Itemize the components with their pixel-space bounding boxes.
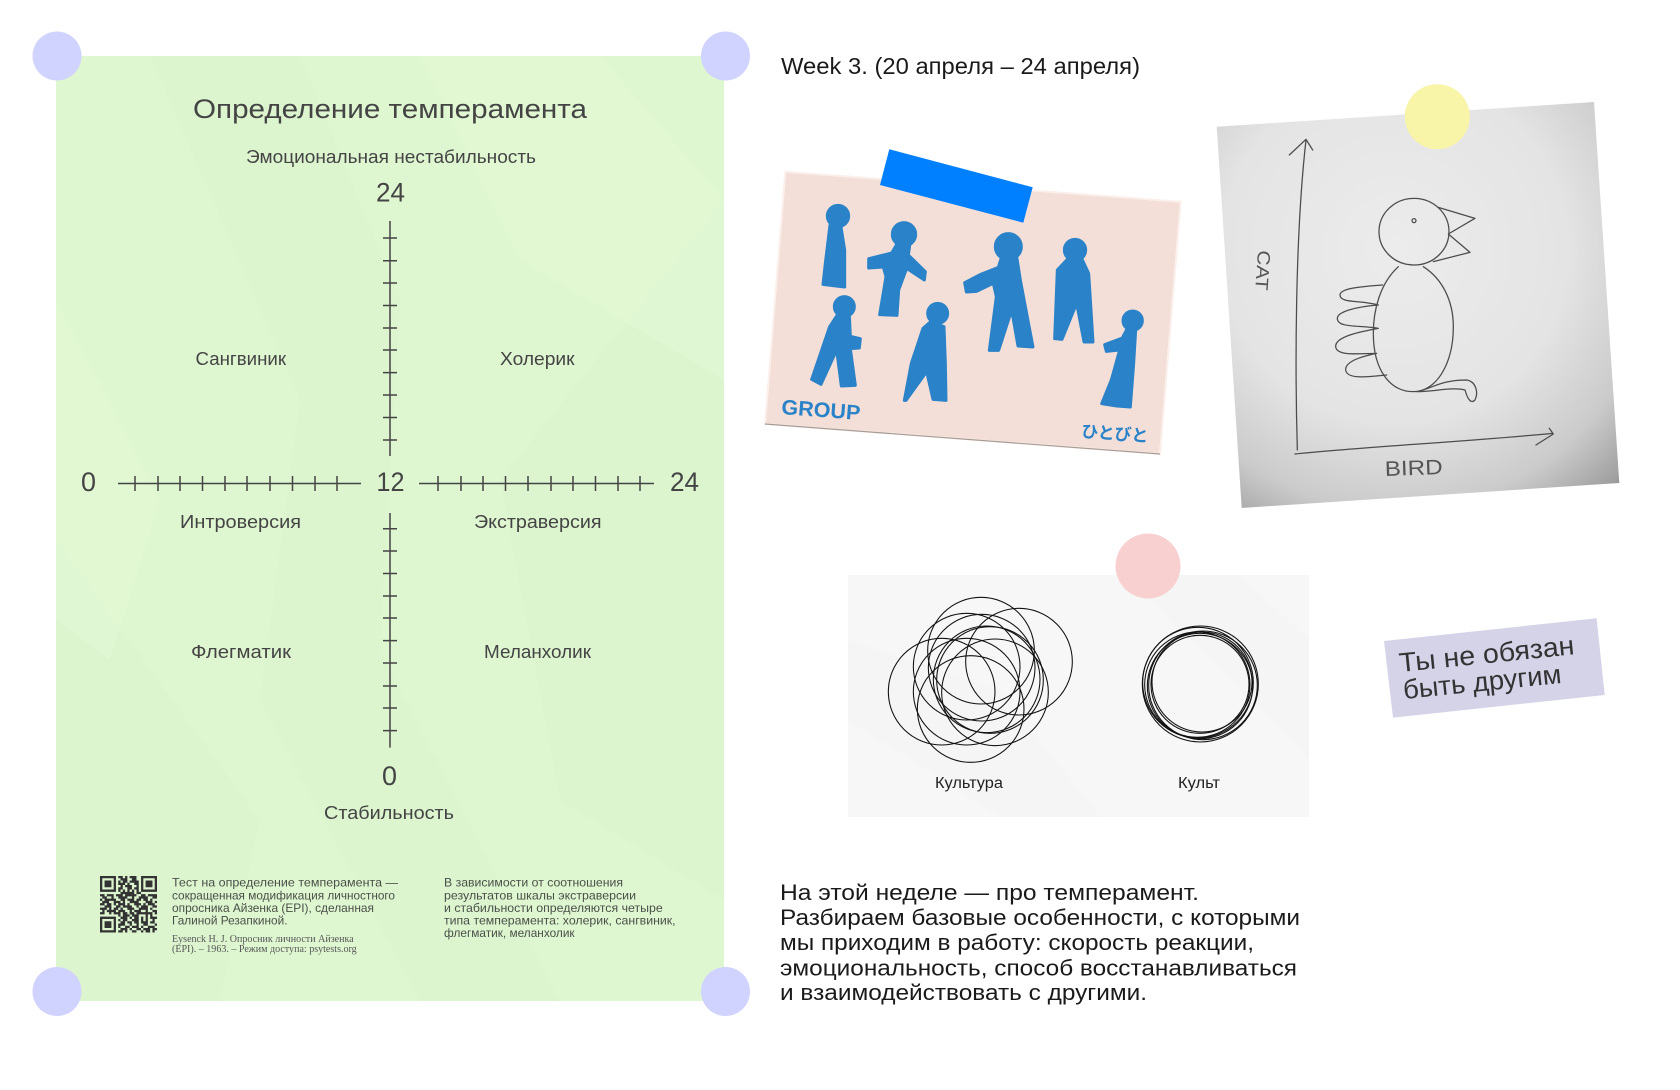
text block: week description: мы приходим в работу: скорость реакции, bbox=[780, 930, 1254, 955]
note text: быть другим bbox=[1402, 659, 1563, 705]
diagram: cult circles bbox=[1142, 626, 1258, 742]
label: introversion: Интроверсия bbox=[180, 512, 301, 532]
pin: top left bbox=[32, 32, 82, 80]
horizontal axis right bbox=[419, 476, 654, 491]
title: Определение темперамента bbox=[193, 94, 588, 124]
quadrant: phlegmatic: Флегматик bbox=[191, 642, 291, 662]
value 24 right: 24 bbox=[670, 467, 699, 497]
icon: QR code bbox=[100, 876, 157, 932]
green crumpled paper bbox=[56, 56, 724, 1001]
card: group of people bbox=[765, 149, 1181, 454]
vertical axis lower bbox=[383, 513, 397, 748]
text block: temperament types: В зависимости от соотношения bbox=[444, 876, 623, 890]
card label: GROUP: GROUP bbox=[781, 396, 861, 425]
quadrant: sanguine: Сангвиник bbox=[196, 349, 286, 369]
panel: temperament poster bbox=[32, 32, 750, 1016]
text block: test description: Галиной Резапкиной. bbox=[172, 914, 288, 928]
note: you don't have to be different bbox=[1384, 618, 1605, 718]
text block: week description: Разбираем базовые особенности, с которыми bbox=[780, 905, 1300, 930]
label: culture: Культура bbox=[935, 775, 1003, 792]
blue tape bbox=[880, 149, 1033, 223]
heading: week: Week 3. (20 апреля – 24 апреля) bbox=[781, 53, 1140, 79]
pink card bbox=[765, 172, 1181, 454]
horizontal axis left bbox=[118, 476, 361, 491]
text block: test description: Тест на определение темперамента — bbox=[172, 876, 398, 890]
figures bbox=[812, 205, 1142, 407]
text block: week description bbox=[780, 880, 1300, 1005]
panel: culture vs cult bbox=[848, 534, 1309, 817]
note text bbox=[1398, 630, 1576, 705]
pin: bottom left bbox=[32, 967, 82, 1016]
pin: yellow bbox=[1405, 84, 1470, 149]
text block: citation: (EPI). – 1963. – Режим доступа: psytests.org bbox=[172, 944, 357, 955]
text block: week description: эмоциональность, способ восстанавливаться bbox=[780, 956, 1297, 980]
card label: japanese: ひとびと bbox=[1081, 422, 1149, 446]
quadrant: melancholic: Меланхолик bbox=[484, 642, 591, 662]
sketch drawing bbox=[1289, 139, 1553, 454]
vertical axis upper bbox=[383, 221, 397, 456]
photo: bird-cat sketch bbox=[1217, 84, 1619, 508]
bottom axis label: Стабильность bbox=[324, 803, 454, 823]
text block: week description: и взаимодействовать с другими. bbox=[780, 980, 1147, 1005]
text block: test description: сокращенная модификация личностного bbox=[172, 888, 395, 902]
white paper bbox=[848, 575, 1309, 817]
grey paper bbox=[1217, 102, 1619, 508]
pin: pink bbox=[1116, 534, 1180, 598]
note text: Ты не обязан bbox=[1398, 630, 1576, 678]
sketch label: bird: BIRD bbox=[1384, 456, 1443, 481]
text block: temperament types: результатов шкалы экстраверсии bbox=[444, 888, 636, 902]
value 0 left: 0 bbox=[81, 467, 96, 497]
text block: test description bbox=[172, 876, 398, 928]
sketch label: cat: CAT bbox=[1251, 250, 1274, 291]
pin: bottom right bbox=[701, 967, 750, 1016]
text block: temperament types: типа темперамента: холерик, сангвиник, bbox=[444, 914, 676, 928]
text block: temperament types bbox=[444, 876, 676, 940]
text block: week description: На этой неделе — про темперамент. bbox=[780, 880, 1199, 905]
top axis label: Эмоциональная нестабильность bbox=[246, 147, 536, 167]
quadrant: choleric: Холерик bbox=[500, 349, 575, 369]
label: extraversion: Экстраверсия bbox=[474, 512, 602, 532]
text block: citation: Eysenck H. J. Опросник личности Айзенка bbox=[172, 934, 354, 945]
value 12 center: 12 bbox=[376, 467, 404, 497]
diagram: culture circles bbox=[888, 597, 1072, 762]
label: cult: Культ bbox=[1178, 775, 1220, 792]
text block: temperament types: флегматик, меланхолик bbox=[444, 926, 575, 940]
text block: test description: опросника Айзенка (EPI), сделанная bbox=[172, 901, 374, 915]
value 24 top: 24 bbox=[376, 178, 405, 208]
pin: top right bbox=[701, 32, 750, 80]
text block: temperament types: и стабильности определяются четыре bbox=[444, 901, 663, 915]
value 0 bottom: 0 bbox=[382, 761, 397, 791]
text block: citation bbox=[172, 934, 357, 955]
